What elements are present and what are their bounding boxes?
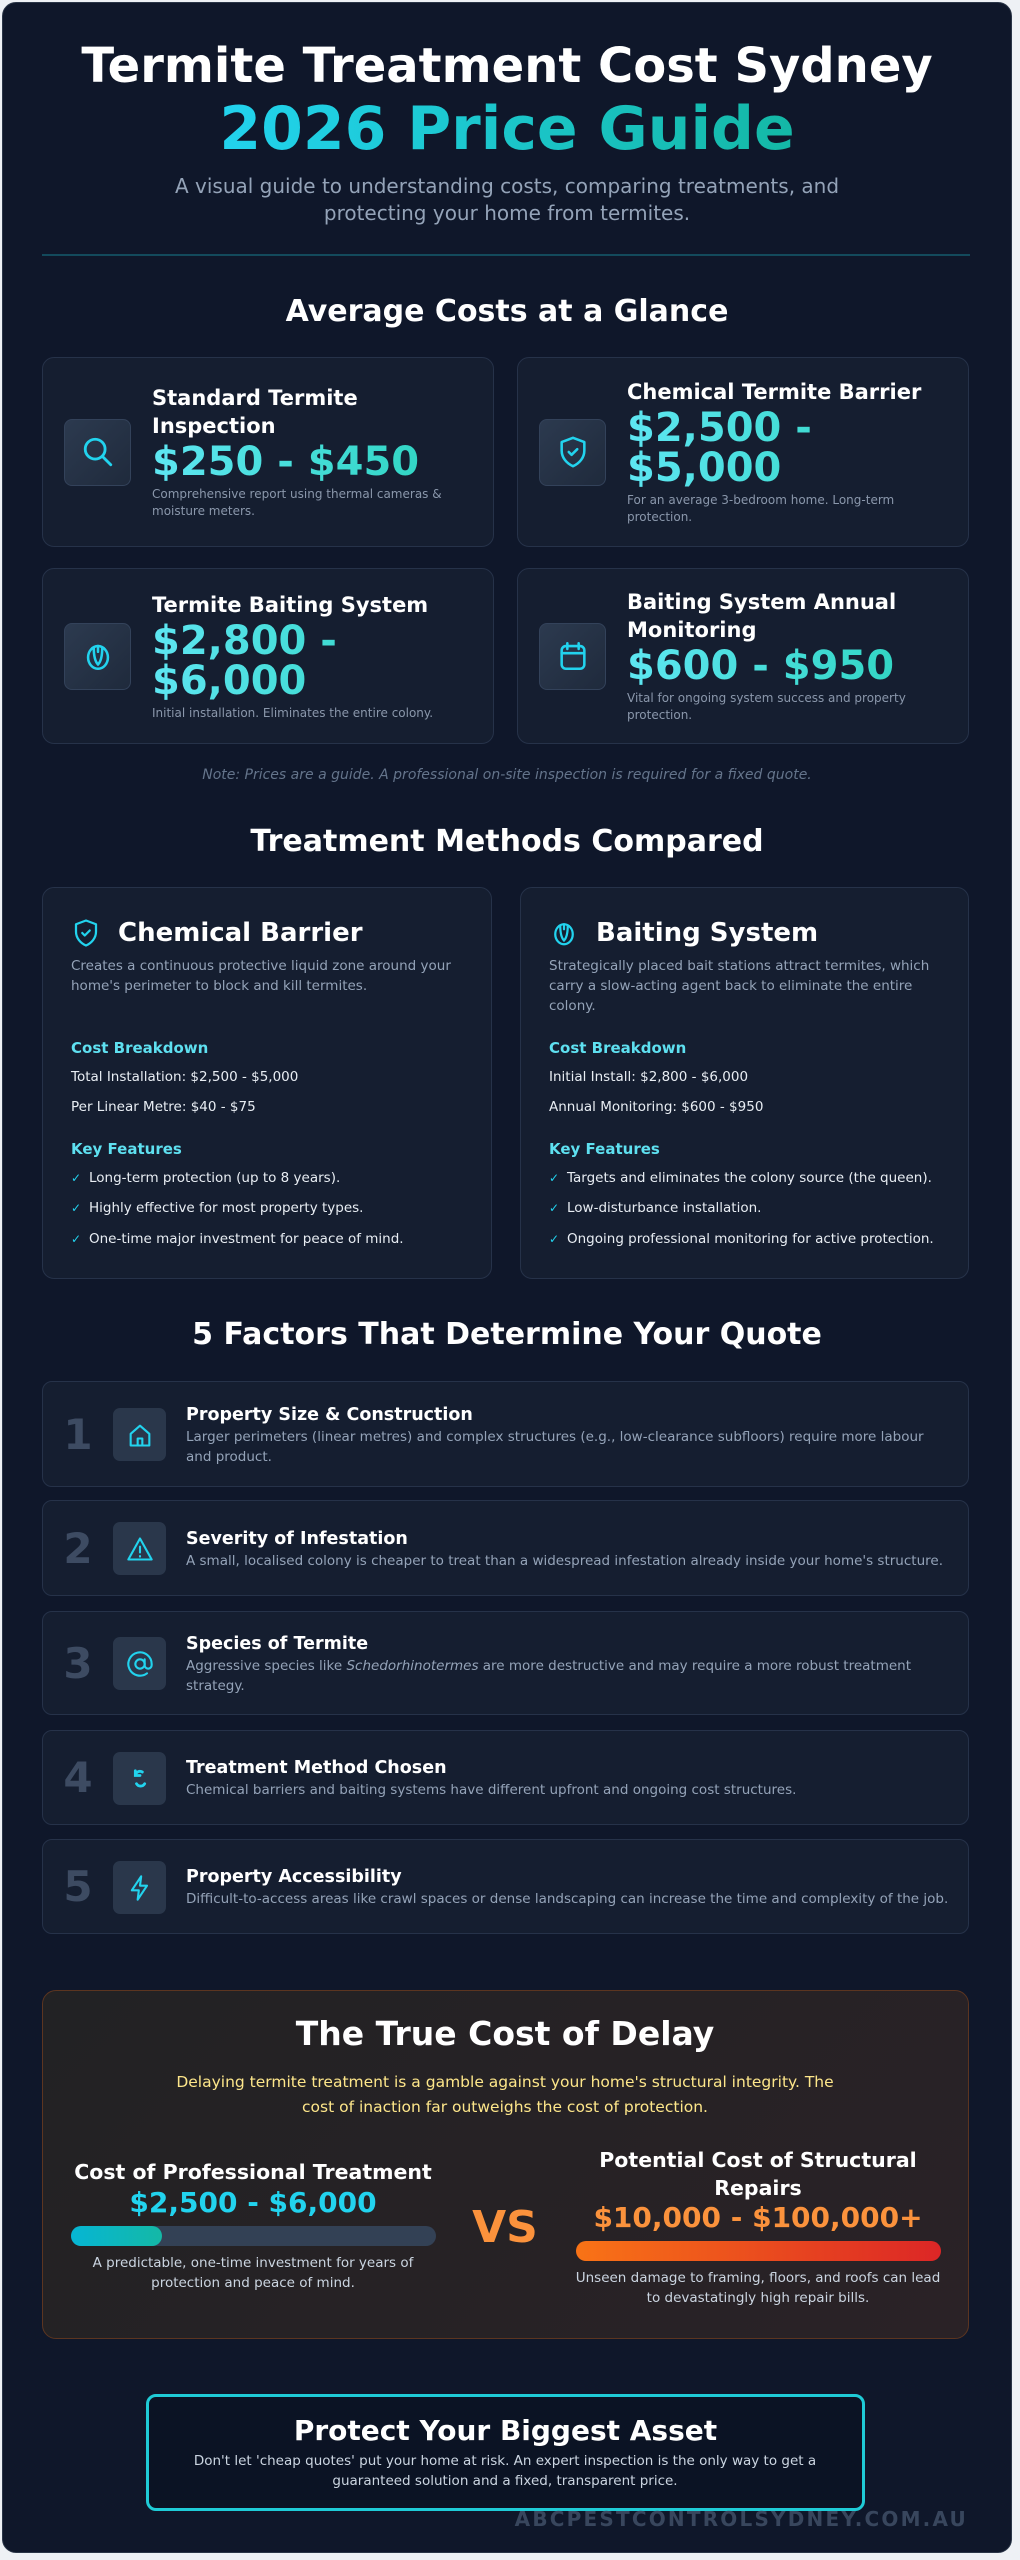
icon: lightning xyxy=(113,1861,166,1914)
card: standard inspection: Comprehensive report using thermal cameras & moisture meters. xyxy=(152,487,442,518)
panel: chemical barrier: Long-term protection (up to 8 years). xyxy=(89,1170,340,1186)
icon: house xyxy=(113,1408,166,1461)
panel: baiting system: ✓ xyxy=(549,1201,559,1215)
factor 5: 5 xyxy=(63,1862,93,1911)
call to action xyxy=(146,2394,865,2511)
icon: shield xyxy=(539,418,606,486)
subtitle: 2026 price guide: 2026 Price Guide xyxy=(219,94,795,164)
icon: at sign xyxy=(113,1637,166,1690)
panel: chemical barrier: Highly effective for most property types. xyxy=(89,1200,363,1216)
factor 2 xyxy=(42,1500,969,1596)
panel: chemical barrier: Total Installation: $2,500 - $5,000 xyxy=(71,1069,298,1085)
card: standard inspection: Standard Termite Inspection xyxy=(152,386,358,438)
panel: chemical barrier: ✓ xyxy=(71,1201,81,1215)
card: chemical barrier cost xyxy=(517,357,969,547)
right: structural repairs: $10,000 - $100,000+ xyxy=(593,2201,923,2234)
panel: baiting system xyxy=(520,887,969,1279)
factor 4: 4 xyxy=(63,1753,93,1802)
panel: baiting system: Initial Install: $2,800 - $6,000 xyxy=(549,1069,748,1085)
card: baiting system cost: $2,800 - $6,000 xyxy=(152,618,337,704)
card: baiting system cost: Initial installation. Eliminates the entire colony. xyxy=(152,706,433,720)
panel: baiting system: Targets and eliminates the colony source (the queen). xyxy=(567,1170,932,1186)
factor 2: Severity of Infestation xyxy=(186,1529,408,1549)
factor 3 xyxy=(42,1611,969,1715)
factor 4 xyxy=(42,1730,969,1825)
panel: baiting system: Strategically placed bait stations attract termites, which carry a slow-acting agent back to eliminate the entire colony. xyxy=(549,958,929,1014)
factor 3: 3 xyxy=(63,1639,93,1688)
heading: true cost of delay: The True Cost of Delay xyxy=(296,2014,714,2053)
bar: treatment xyxy=(71,2226,436,2246)
panel: baiting system: Key Features xyxy=(549,1140,660,1158)
panel: chemical barrier xyxy=(42,887,492,1279)
intro text: A visual guide to understanding costs, comparing treatments, and protecting your home from termites. xyxy=(175,174,839,225)
panel: chemical barrier: Creates a continuous protective liquid zone around your home's perimeter to block and kill termites. xyxy=(71,958,451,994)
icon: warning xyxy=(113,1522,166,1575)
panel: chemical barrier: Chemical Barrier xyxy=(118,918,363,948)
footer: website: ABCPESTCONTROLSYDNEY.COM.AU xyxy=(515,2507,968,2531)
heading: treatment methods: Treatment Methods Compared xyxy=(250,824,764,859)
card: chemical barrier cost: Chemical Termite Barrier xyxy=(627,380,921,404)
icon: switch xyxy=(113,1752,166,1805)
icon: bait xyxy=(64,622,131,690)
panel: chemical barrier: ✓ xyxy=(71,1171,81,1185)
VS: VS xyxy=(472,2202,538,2253)
bar: repairs xyxy=(576,2241,941,2261)
icon: search xyxy=(64,418,131,486)
intro: Delaying termite treatment is a gamble against your home's structural integrity. The cost of inaction far outweighs the cost of protection. xyxy=(176,2073,834,2116)
right: structural repairs: Unseen damage to framing, floors, and roofs can lead to devastatingly high repair bills. xyxy=(576,2270,940,2306)
factor 5: Property Accessibility xyxy=(186,1867,402,1887)
left: professional treatment: Cost of Professional Treatment xyxy=(74,2160,432,2184)
panel: chemical barrier: One-time major investment for peace of mind. xyxy=(89,1231,404,1247)
right: structural repairs xyxy=(576,2148,941,2306)
panel: baiting system: ✓ xyxy=(549,1232,559,1246)
title: Termite Treatment Cost Sydney xyxy=(81,38,933,94)
card: standard inspection xyxy=(42,357,494,547)
panel: baiting system: Ongoing professional monitoring for active protection. xyxy=(567,1231,934,1247)
card: chemical barrier cost: For an average 3-bedroom home. Long-term protection. xyxy=(627,493,894,524)
factor 4: Treatment Method Chosen xyxy=(186,1758,447,1778)
factor 4: Chemical barriers and baiting systems have different upfront and ongoing cost structures. xyxy=(186,1782,796,1798)
factor 5 xyxy=(42,1839,969,1934)
factor 2: 2 xyxy=(63,1524,93,1573)
card: chemical barrier cost: $2,500 - $5,000 xyxy=(627,405,812,491)
left: professional treatment: $2,500 - $6,000 xyxy=(129,2186,377,2219)
call to action: Don't let 'cheap quotes' put your home at risk. An expert inspection is the only way to get a guaranteed solution and a fixed, transparent price. xyxy=(194,2453,816,2489)
panel: baiting system: Annual Monitoring: $600 - $950 xyxy=(549,1099,763,1115)
left: professional treatment xyxy=(71,2160,436,2291)
heading: average costs: Average Costs at a Glance xyxy=(286,294,728,329)
panel: baiting system: ✓ xyxy=(549,1171,559,1185)
left: professional treatment: A predictable, one-time investment for years of protection and peace of mind. xyxy=(93,2255,413,2291)
card: annual monitoring: Vital for ongoing system success and property protection. xyxy=(627,691,906,722)
factor 5: Difficult-to-access areas like crawl spaces or dense landscaping can increase the time and complexity of the job. xyxy=(186,1891,948,1907)
factor 3: Species of Termite xyxy=(186,1634,368,1654)
panel: cost of delay xyxy=(42,1990,969,2339)
card: standard inspection: $250 - $450 xyxy=(152,439,419,485)
panel: chemical barrier: Per Linear Metre: $40 - $75 xyxy=(71,1099,256,1115)
heading: 5 factors: 5 Factors That Determine Your Quote xyxy=(192,1317,822,1352)
right: structural repairs: Potential Cost of Structural Repairs xyxy=(599,2148,917,2200)
factor 3: Aggressive species like Schedorhinotermes are more destructive and may require a more robust treatment strategy. xyxy=(186,1658,911,1694)
panel: chemical barrier: Cost Breakdown xyxy=(71,1039,208,1057)
icon: bait xyxy=(554,923,574,946)
card: baiting system cost xyxy=(42,568,494,744)
panel: chemical barrier: Key Features xyxy=(71,1140,182,1158)
panel: chemical barrier: ✓ xyxy=(71,1232,81,1246)
factor 1: Property Size & Construction xyxy=(186,1405,473,1425)
card: annual monitoring: $600 - $950 xyxy=(627,643,894,689)
panel: baiting system: Low-disturbance installation. xyxy=(567,1200,761,1216)
factor 1: 1 xyxy=(63,1410,93,1459)
factor 1 xyxy=(42,1381,969,1487)
note: Note: Prices are a guide. A professional on-site inspection is required for a fixed quote. xyxy=(202,767,812,783)
card: annual monitoring xyxy=(517,568,969,744)
card: annual monitoring: Baiting System Annual Monitoring xyxy=(627,590,896,642)
call to action: Protect Your Biggest Asset xyxy=(294,2414,717,2447)
panel: baiting system: Cost Breakdown xyxy=(549,1039,686,1057)
panel: baiting system: Baiting System xyxy=(596,918,818,948)
card: baiting system cost: Termite Baiting System xyxy=(152,592,428,616)
icon: calendar xyxy=(539,622,606,690)
factor 2: A small, localised colony is cheaper to treat than a widespread infestation already inside your home's structure. xyxy=(186,1553,943,1569)
factor 1: Larger perimeters (linear metres) and complex structures (e.g., low-clearance subfloors) require more labour and product. xyxy=(186,1429,924,1465)
icon: shield xyxy=(74,919,98,947)
